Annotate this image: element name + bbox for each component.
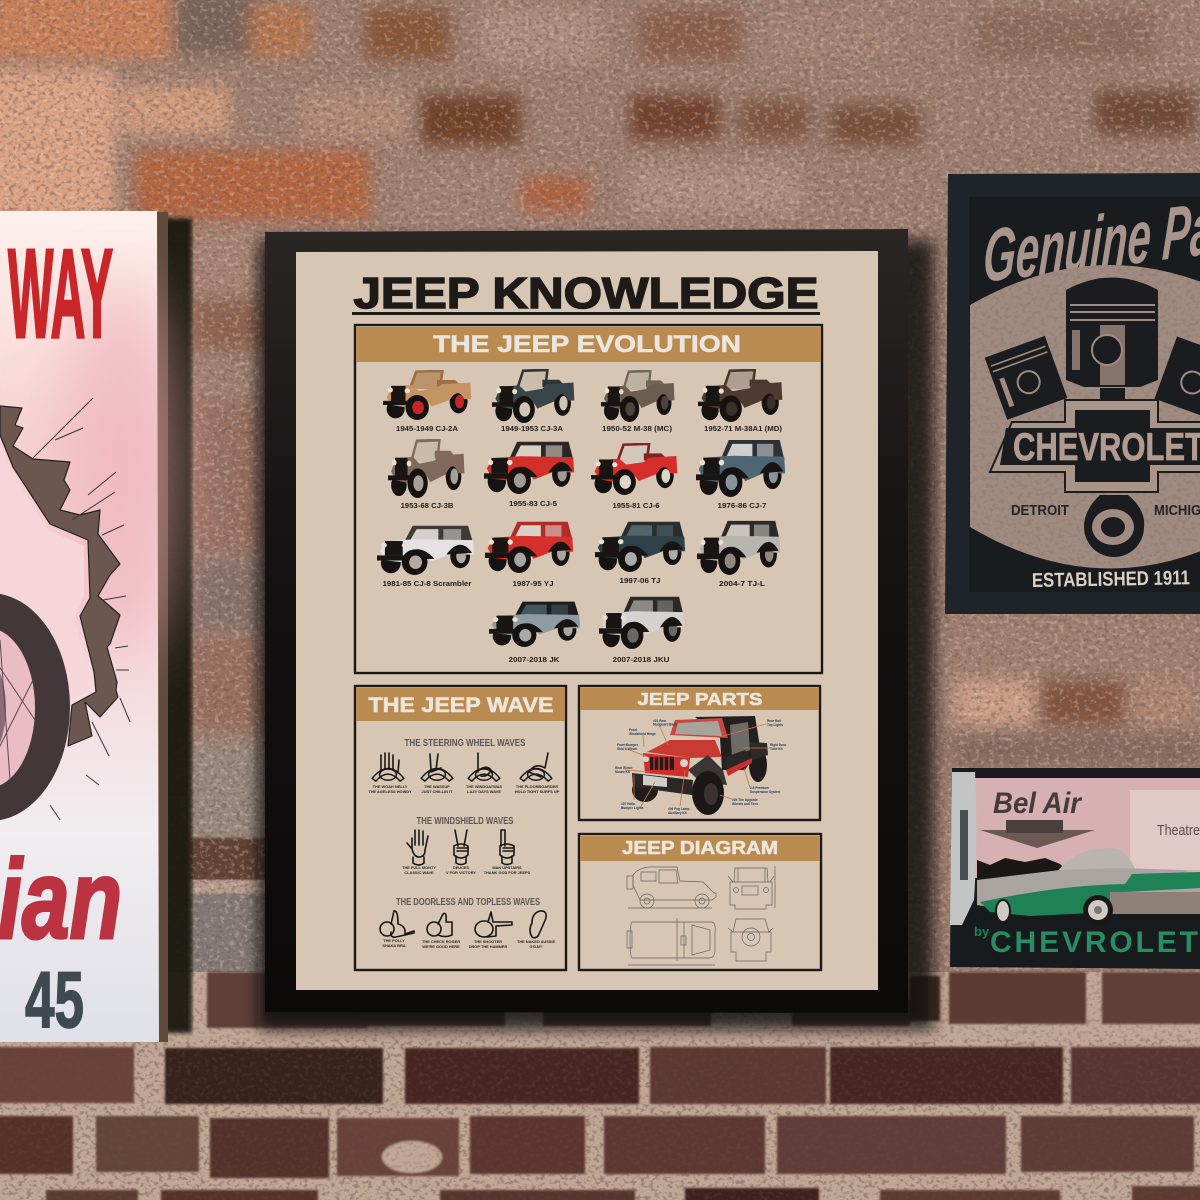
part callouts: Front Bumper: [617, 743, 639, 747]
left piston: [985, 336, 1067, 420]
motorcycle tyre: [0, 593, 70, 821]
part callouts: Rear Winch: [615, 766, 633, 770]
poster shadow strip: [162, 218, 192, 1033]
jeep 1997-06 TJ: 1997-06 TJ: [620, 576, 660, 585]
foot: naked aussie: THE NAKED AUSSIE: [517, 939, 555, 944]
hand: check roger: [422, 913, 460, 949]
jeep 2004-7 TJ-L: [697, 521, 780, 588]
jeep 1955-81 CJ-6: [591, 444, 677, 510]
Bel Air script: Bel Air: [993, 787, 1083, 820]
jeep 1997-06 TJ: [595, 522, 685, 585]
hand: wassup: JUST CHILLIN IT: [422, 789, 453, 794]
poster frame: [265, 229, 908, 1013]
CHEVROLET green lettering: CHEVROLET: [990, 926, 1198, 959]
speed lines: [33, 398, 130, 820]
hand: deuces: V FOR VICTORY: [446, 870, 476, 875]
part callouts: Suspension System: [750, 790, 780, 794]
hand: wassup: [421, 754, 453, 794]
hand: polly: THE POLLY: [383, 938, 405, 943]
torn interior showing poster: [0, 440, 90, 702]
panel: Jeep parts: [579, 686, 820, 820]
diagram heading: JEEP DIAGRAM: [622, 838, 778, 858]
hand: shooter: [469, 912, 512, 949]
parts heading: JEEP PARTS: [638, 689, 762, 709]
panel: the Jeep wave: [355, 686, 566, 970]
tan central panel: [970, 265, 1200, 568]
jeep 1952-71 M-38A1: 1952-71 M-38A1 (MD): [704, 424, 783, 433]
Bel Air emblem: [980, 830, 1095, 848]
part callouts: #05 Tire Upgrade: [732, 798, 758, 802]
Detroit label: DETROIT: [1011, 503, 1069, 519]
hand: deuces: DEUCES: [453, 865, 470, 870]
hand: wassup: THE WASSUP: [424, 784, 450, 789]
part callouts: Rear Roll: [767, 719, 781, 723]
script word ending: ian: [0, 837, 122, 962]
upper wall blotches: [0, 0, 1200, 840]
blueprint: side view: [627, 867, 716, 908]
by label: by: [974, 924, 990, 939]
number 45: 45: [25, 955, 84, 1044]
part callouts: Mount Kit: [615, 770, 631, 774]
jeep 1987-95 YJ: [485, 522, 573, 588]
hand: shooter: DROP THE HAMMER: [469, 944, 507, 949]
part callouts: Bumper Lights: [621, 806, 644, 810]
foot: naked aussie: [517, 911, 555, 949]
wave heading: THE JEEP WAVE: [368, 693, 554, 717]
hand: full monty: [402, 830, 436, 875]
part callouts: Skid & Winch: [617, 747, 637, 751]
jeep 1950-52 M-38: 1950-52 M-38 (MC): [602, 424, 673, 433]
foot: naked aussie: G'DAY!: [529, 944, 543, 949]
hand: full monty: CLASSIC WAVE: [404, 870, 434, 875]
jeep 1945-1949 CJ-2A: 1945-1949 CJ-2A: [396, 424, 459, 433]
jeep 2007-2018 JKU: [599, 597, 684, 664]
hand: windowatwas: LAZY DAYS WAVE: [467, 789, 501, 794]
part callouts: Windshield Hinge: [629, 732, 656, 736]
windshield waves heading: THE WINDSHIELD WAVES: [416, 816, 514, 827]
part callouts: 2.5 Premium: [750, 786, 769, 790]
part callouts: Front: [629, 728, 638, 732]
evolution heading: THE JEEP EVOLUTION: [433, 331, 741, 358]
hand: check roger: WE'RE GOOD HERE: [422, 944, 460, 949]
hand: woah nelly: THE WOAH NELLY: [373, 784, 408, 789]
cream paper: [296, 251, 878, 990]
jeep 1950-52 M-38: [601, 371, 674, 433]
theatre sketch: [1130, 790, 1200, 870]
hand: floorboarder: HOLD TIGHT SURFS UP: [515, 789, 560, 794]
jeep 1981-85 CJ-8 Scrambler: 1981-85 CJ-8 Scrambler: [382, 579, 472, 588]
jeep 1953-68 CJ-3B: 1953-68 CJ-3B: [400, 501, 454, 510]
panel: the Jeep evolution: [355, 325, 822, 673]
jeep 1955-83 CJ-5: [484, 442, 574, 508]
hand: deuces: [446, 830, 476, 875]
blueprint: rear view: [728, 919, 773, 961]
jeep 1976-86 CJ-7: 1976-86 CJ-7: [718, 501, 766, 510]
hand: man upstairs: MAN UPSTAIRS: [492, 865, 522, 870]
jeep 1981-85 CJ-8 Scrambler: [377, 526, 474, 588]
blueprint: top view: [627, 918, 715, 965]
hand: check roger: THE CHECK ROGER: [422, 939, 460, 944]
red jeep illustration: [632, 716, 768, 815]
title: JEEP KNOWLEDGE: [354, 269, 818, 318]
hand: floorboarder: [515, 753, 560, 794]
jeep 1953-68 CJ-3B: [388, 440, 464, 510]
jeep 1955-81 CJ-6: 1955-81 CJ-6: [612, 501, 660, 510]
hand: man upstairs: THANK GOD FOR JEEPS: [484, 870, 531, 875]
right sign: Chevrolet genuine parts: [945, 173, 1200, 614]
part callouts: Rigid Door: [770, 743, 787, 747]
connecting rod: [1084, 495, 1144, 557]
part callouts: [615, 719, 787, 815]
panel: Jeep diagram: [579, 834, 821, 970]
part callouts: #07 Hella: [621, 802, 635, 806]
green Chevrolet car: [977, 848, 1200, 925]
hand: polly: [380, 911, 414, 948]
part callouts: Mudguard Bash: [653, 722, 677, 726]
hand: woah nelly: THE AGELESS HOWDY: [368, 789, 412, 794]
steering wheel waves heading: THE STEERING WHEEL WAVES: [404, 738, 526, 749]
part callouts: Top Lights: [767, 723, 783, 727]
hand: polly: SHAKA BRA: [382, 943, 406, 948]
left poster: Indian motorcycle advert: WAY: [8, 223, 113, 364]
jeep 1952-71 M-38A1: [698, 370, 783, 433]
jeep 1976-86 CJ-7: [696, 440, 785, 510]
doorless and topless waves heading: THE DOORLESS AND TOPLESS WAVES: [396, 897, 540, 908]
hand: full monty: THE FULL MONTY: [402, 865, 436, 870]
right sign: Bel Air by Chevrolet: [950, 768, 1200, 969]
part callouts: #01 Rear: [653, 719, 667, 723]
hand: man upstairs: [484, 830, 531, 875]
jeep 2004-7 TJ-L: 2004-7 TJ-L: [719, 579, 765, 588]
lower wall mortar and bricks: [0, 972, 1200, 1200]
jeep 1949-1953 CJ-3A: 1949-1953 CJ-3A: [501, 424, 564, 433]
right piston: [1154, 337, 1200, 420]
left poster: Indian motorcycle advert: [0, 211, 192, 1044]
hand: windowatwas: THE WINDOATWAS: [466, 784, 502, 789]
Chevrolet bowtie: [990, 400, 1200, 492]
centre piston: [1066, 278, 1158, 402]
hand: woah nelly: [368, 753, 412, 794]
jeep 1945-1949 CJ-2A: [383, 371, 471, 433]
part callouts: Wheels and Tires: [732, 802, 758, 806]
tree line: [977, 858, 1075, 878]
frame drop shadow: [258, 240, 934, 1030]
hand: floorboarder: THE FLOORBOARDER: [516, 784, 558, 789]
hand: shooter: THE SHOOTER: [474, 939, 502, 944]
part callouts: Auxiliary Kit: [668, 811, 688, 815]
jeep 2007-2018 JK: 2007-2018 JK: [508, 655, 560, 664]
jeep 1955-83 CJ-5: 1955-83 CJ-5: [509, 499, 557, 508]
part callouts: #06 Fog Lamp: [668, 807, 689, 811]
blueprint: front view: [728, 866, 775, 909]
jeep 2007-2018 JKU: 2007-2018 JKU: [612, 655, 670, 664]
jeep 1987-95 YJ: 1987-95 YJ: [512, 579, 554, 588]
jeep 1949-1953 CJ-3A: [492, 370, 574, 433]
jeep 2007-2018 JK: [489, 602, 580, 664]
hand: windowatwas: [466, 753, 502, 794]
torn paper crack: [0, 406, 120, 746]
part callouts: Tube Kit: [770, 747, 783, 751]
